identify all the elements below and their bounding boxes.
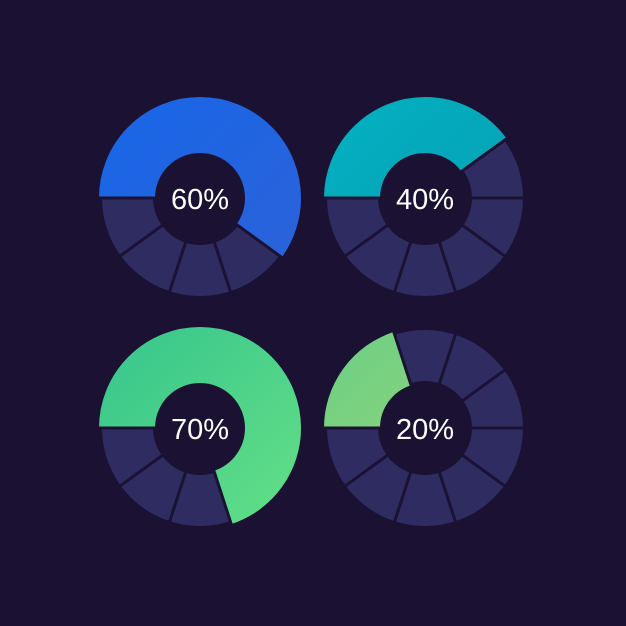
chart: 40% [322,125,528,296]
chart: 40%: 40% [396,184,454,216]
chart: 70%: 70% [171,414,229,446]
chart: 20% [322,330,528,526]
chart: 60%: 60% [171,184,229,216]
chart: 70% [97,355,273,526]
chart: 20%: 20% [396,414,454,446]
chart: 60% [97,125,283,296]
